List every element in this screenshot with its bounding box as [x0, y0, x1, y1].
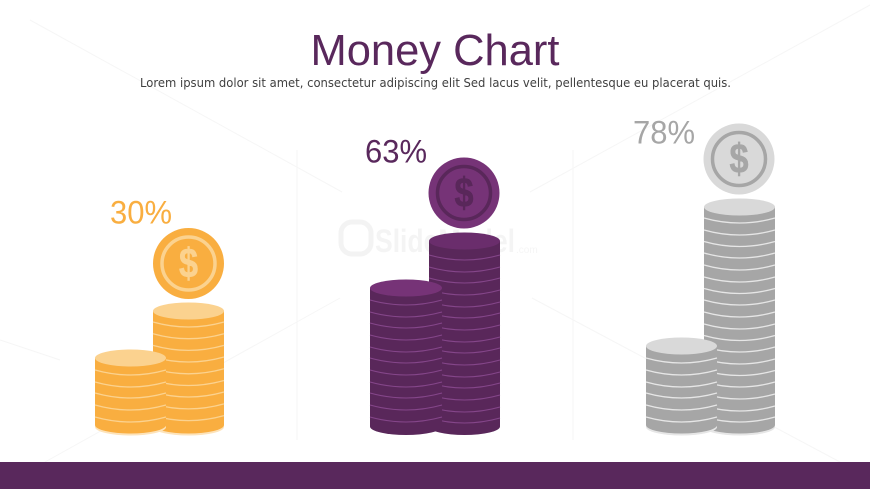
- watermark: SlideModel: [375, 223, 515, 259]
- icon: gray dollar coin: [704, 124, 774, 194]
- icon: purple dollar coin: [428, 158, 500, 228]
- purple short coin stack: [370, 280, 442, 435]
- gray tall coin stack: [704, 198, 775, 436]
- column: 30% orange: [95, 194, 224, 436]
- percentage label 63%: 63%: [365, 134, 427, 170]
- orange short coin stack: [95, 350, 166, 436]
- subtitle text: Lorem ipsum dolor sit amet, consectetur adipiscing elit Sed lacus velit, pellentesque eu placerat quis.: [140, 76, 731, 90]
- orange tall coin stack: [153, 302, 224, 436]
- percentage label 78%: 78%: [633, 114, 695, 150]
- column: 78% gray: [633, 114, 775, 436]
- icon: orange dollar coin: $: [179, 240, 198, 286]
- purple tall coin stack: [429, 232, 500, 435]
- percentage label 30%: 30%: [110, 194, 172, 230]
- icon: purple dollar coin: $: [454, 169, 474, 216]
- column: 63% purple: [365, 134, 500, 435]
- footer bar: [0, 462, 870, 489]
- icon: orange dollar coin: [153, 228, 224, 299]
- watermark: .com: [516, 245, 538, 256]
- icon: gray dollar coin: $: [730, 135, 748, 182]
- title: Money Chart: [310, 26, 560, 75]
- gray short coin stack: [646, 338, 717, 436]
